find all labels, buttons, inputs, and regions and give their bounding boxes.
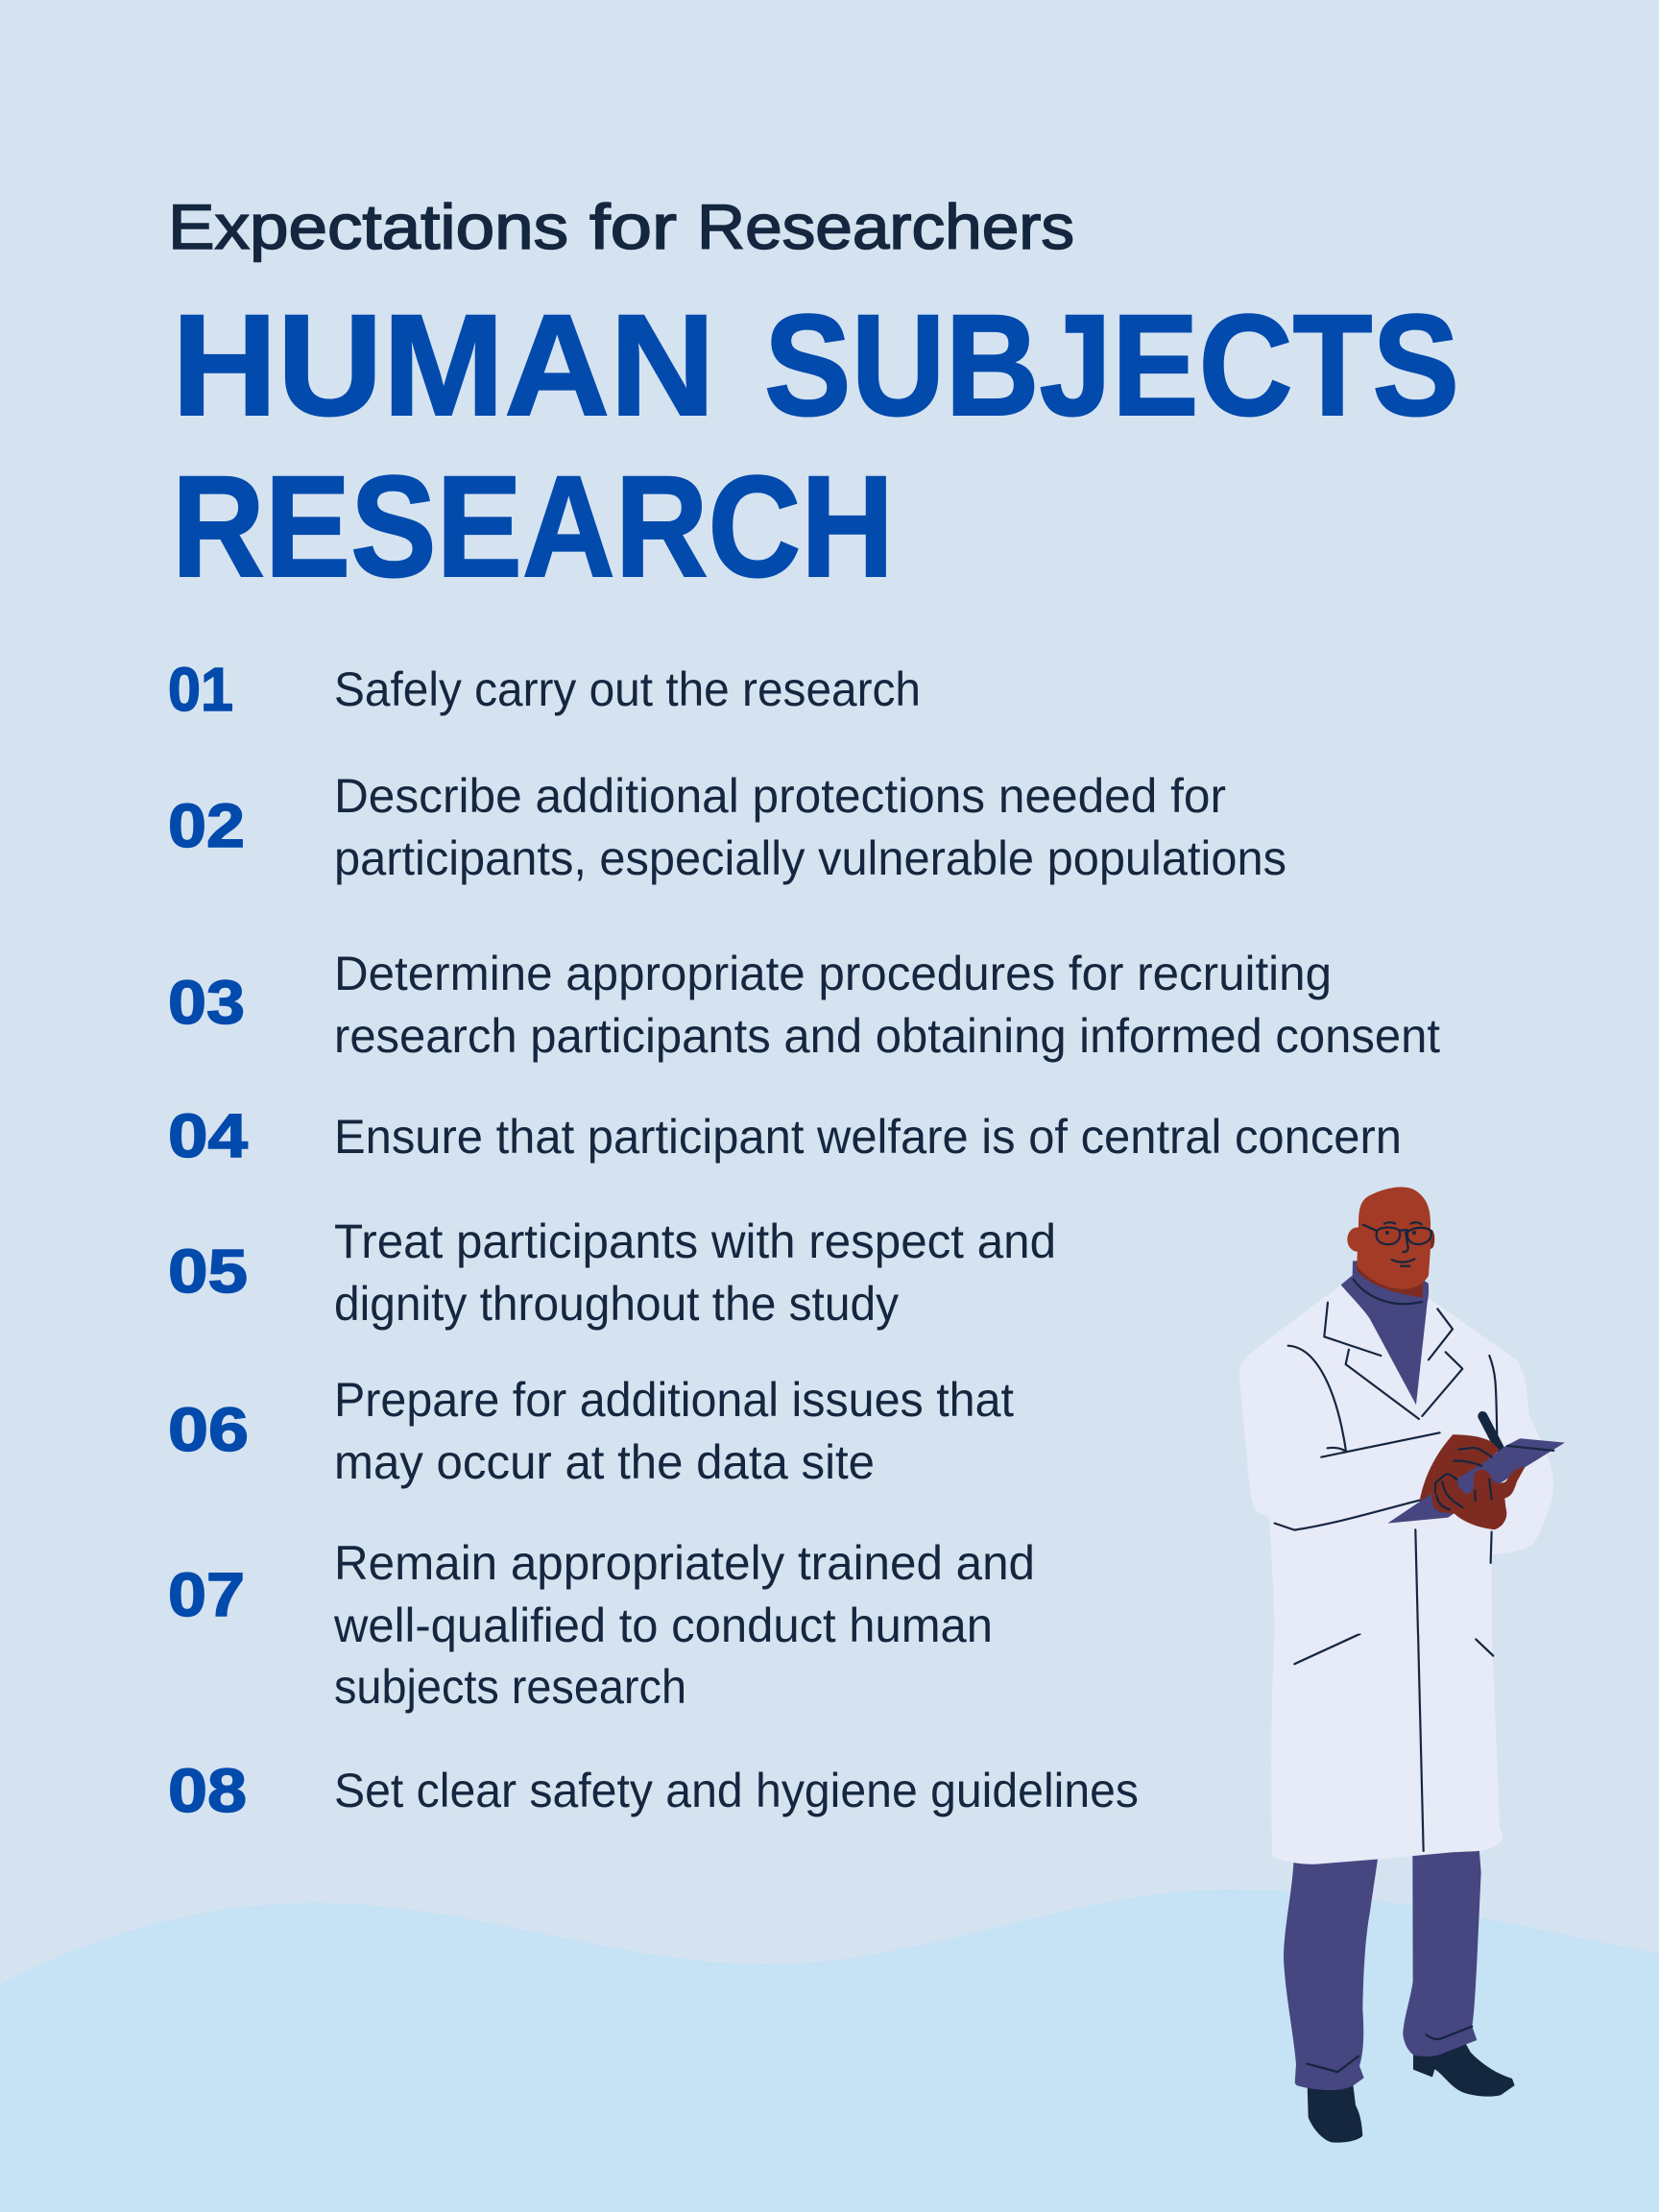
item 08 [168,1756,1139,1825]
pupils [1385,1231,1416,1235]
title [172,284,1459,607]
item 02: participants, especially vulnerable populations [334,831,1286,885]
hand back [1420,1434,1500,1514]
item 08: 08 [168,1756,247,1825]
item 07: 07 [168,1560,245,1629]
illustration: researcher in lab coat [1239,1187,1565,2143]
item 07 [168,1536,1035,1714]
title: HUMAN [172,284,715,445]
title: SUBJECTS [764,284,1459,445]
item 06: Prepare for additional issues that [334,1373,1014,1427]
item 07: Remain appropriately trained and [334,1536,1035,1590]
clipboard [1387,1438,1565,1524]
finger lines [1435,1446,1553,1509]
subtitle [168,191,1074,262]
title: RESEARCH [172,445,894,607]
item 05 [168,1214,1056,1331]
item 02 [168,769,1286,885]
lower body: trousers, shoes, coat skirt [1271,1630,1515,2143]
item 05: dignity throughout the study [334,1277,899,1331]
item 05: Treat participants with respect and [334,1214,1056,1268]
neck shadow [1357,1248,1431,1298]
hand front [1431,1467,1525,1529]
item 05: 05 [168,1237,248,1306]
item 06 [168,1373,1014,1489]
subtitle: Researchers [697,191,1074,262]
item 01: 01 [168,655,233,724]
item 02: 02 [168,791,245,860]
item 03: 03 [168,968,245,1037]
item 01: Safely carry out the research [334,662,921,716]
item 04: 04 [168,1101,248,1170]
item 02: Describe additional protections needed for [334,769,1226,823]
upper body in crop coords [1239,1187,1565,1634]
face lines and glasses [1354,1222,1431,1304]
item 04 [168,1101,1402,1170]
head [1347,1187,1434,1289]
pen [1482,1416,1500,1448]
coat lines [1275,1303,1497,1634]
item 01 [168,655,921,724]
trousers [1284,1848,1481,2090]
item 06: may occur at the data site [334,1435,875,1489]
subtitle: for [589,191,677,262]
item 06: 06 [168,1395,249,1464]
item 03: Determine appropriate procedures for recruiting [334,947,1332,1000]
item 07: subjects research [334,1660,686,1714]
item 03 [168,947,1440,1063]
item 04: Ensure that participant welfare is of central concern [334,1110,1402,1164]
coat skirt [1271,1630,1503,1864]
turtleneck [1341,1261,1429,1405]
item 07: well-qualified to conduct human [333,1599,993,1652]
item 08: Set clear safety and hygiene guidelines [334,1764,1139,1817]
item 03: research participants and obtaining informed consent [334,1009,1440,1063]
coat upper [1239,1285,1553,1634]
background wave [0,1889,1659,2212]
subtitle: Expectations [168,191,568,262]
shoes [1308,2044,1515,2143]
